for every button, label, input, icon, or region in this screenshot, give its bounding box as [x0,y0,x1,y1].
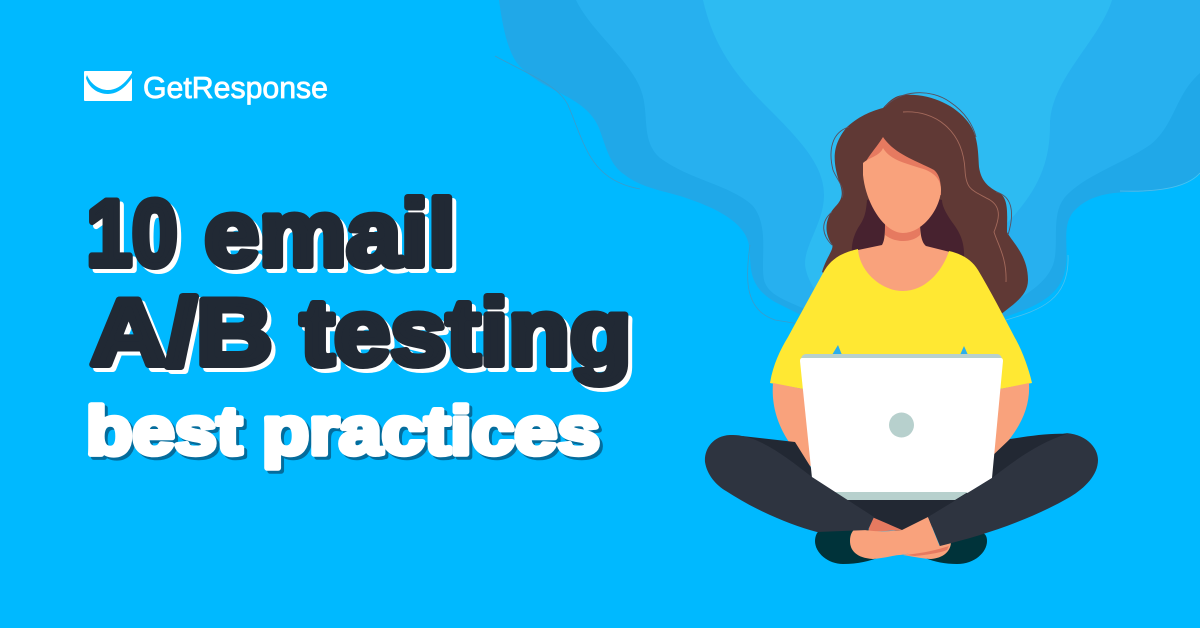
title line 3: best practices [86,393,603,472]
logo wordmark: GetResponse [143,70,328,105]
laptop top edge [801,354,1002,359]
hair shadow behind neck [852,190,964,258]
title line 1: 10 email: 10 [86,180,178,286]
title line 3: best practices: best [89,396,245,472]
laptop [800,354,1003,500]
title line 3: best practices: practices [262,393,600,469]
title line 1: 10 email: email [204,180,456,286]
legs back [742,434,1067,532]
neck [858,222,950,300]
hair back [822,95,1028,330]
feet [815,523,987,564]
title line 2: A/B testing: A/B [94,284,276,388]
laptop logo dot [889,412,914,438]
neck shadow [885,224,920,241]
face with forehead shadow [863,137,941,233]
leg front left [705,435,874,532]
title line 3: best practices: practices [265,396,603,472]
title line 1: 10 email: email [208,184,460,290]
icon: envelope with smile [84,71,132,101]
hair wisps [824,93,1012,282]
background: layered smoke waves [495,0,1200,326]
hands and ankles [850,517,951,559]
laptop screen [800,358,1003,493]
illustration: woman with laptop [705,93,1098,564]
laptop base [834,492,968,500]
yellow shirt [770,249,1032,389]
title line 2: A/B testing: testing [304,284,636,388]
title line 1: 10 email: 10 [90,184,182,290]
arms [773,383,1029,470]
title [86,180,636,472]
title line 2: A/B testing: A/B [90,280,272,384]
shirt gaps [832,345,968,355]
logo: GetResponse [84,70,328,105]
title line 2: A/B testing [90,280,636,388]
title line 2: A/B testing: testing [300,280,632,384]
leg front right [928,433,1098,546]
title line 1: 10 email [86,180,460,290]
title line 3: best practices: best [86,393,242,469]
